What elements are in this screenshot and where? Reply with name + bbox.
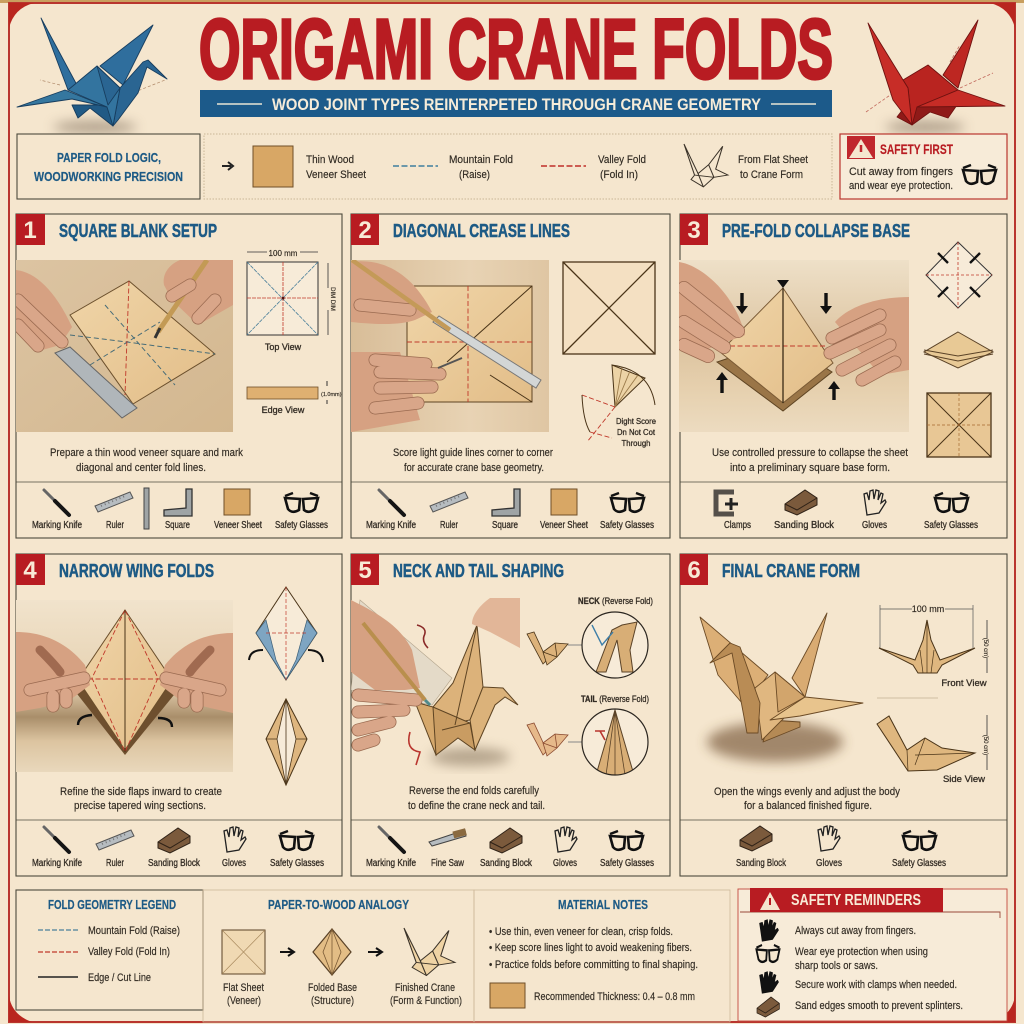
heading: fold logic — [34, 151, 183, 184]
photo: scoring crease — [351, 260, 549, 432]
tools row: Marking Knife — [366, 520, 416, 531]
step number 1: 1 — [23, 217, 37, 244]
key: flat to crane — [738, 154, 808, 181]
step text: for accurate crane base geometry. — [404, 462, 544, 474]
step text — [60, 786, 222, 812]
safety text — [849, 166, 953, 192]
diagram: side view: (50 cm) — [982, 735, 988, 755]
step number 3: 3 — [687, 217, 701, 244]
reminder 2: sharp tools or saws. — [795, 960, 878, 972]
flat sheet: (Veneer) — [227, 995, 261, 1007]
flat sheet: Flat Sheet — [223, 982, 264, 994]
step text: into a preliminary square base form. — [730, 462, 890, 474]
arrow — [280, 948, 294, 956]
key: flat to crane: From Flat Sheet — [738, 154, 808, 166]
step number 2 — [351, 214, 379, 245]
heading: safety first: SAFETY FIRST — [880, 141, 953, 157]
reminder 3: Secure work with clamps when needed. — [795, 979, 957, 991]
key: thin wood: Thin Wood — [306, 154, 354, 166]
tools row: Gloves — [862, 520, 887, 531]
step heading: PRE-FOLD COLLAPSE BASE — [722, 221, 910, 241]
diagram: edge view: Edge View — [262, 405, 305, 415]
step text: to define the crane neck and tail. — [408, 800, 545, 812]
tools row: Ruler — [106, 858, 124, 869]
note bullets: • Practice folds before committing to final shaping. — [489, 959, 698, 971]
crane caption: Finished Crane — [395, 982, 455, 994]
legend heading: FOLD GEOMETRY LEGEND — [48, 898, 176, 912]
step heading: DIAGONAL CREASE LINES — [393, 221, 570, 241]
note bullets: • Use thin, even veneer for clean, crisp folds. — [489, 926, 673, 938]
diagram: wing flaps — [249, 587, 323, 785]
tools row: Gloves — [553, 858, 577, 869]
panel: step 6 — [680, 554, 1007, 876]
tools row: Clamps — [724, 520, 751, 531]
key: valley fold: Valley Fold — [598, 154, 646, 166]
step text: Use controlled pressure to collapse the sheet — [712, 447, 908, 459]
legend: mountain: Mountain Fold (Raise) — [88, 925, 180, 937]
tools row: Safety Glasses — [270, 858, 324, 869]
icon: glove — [760, 972, 778, 993]
tools row: Veneer Sheet — [540, 520, 588, 531]
tools row: Safety Glasses — [892, 858, 946, 869]
notes heading: MATERIAL NOTES — [558, 898, 648, 912]
icon: line crane — [684, 144, 728, 187]
diagram: front view: Front View — [941, 678, 987, 689]
icon: glasses — [963, 165, 996, 184]
step text — [50, 447, 243, 474]
diagram: side view: Side View — [943, 774, 985, 785]
recommended thickness — [490, 983, 695, 1008]
photo: marking the veneer — [16, 260, 233, 432]
step text: Open the wings evenly and adjust the body — [714, 786, 900, 798]
photo: collapsing base — [679, 260, 909, 432]
step text — [393, 447, 553, 474]
legend: valley: Valley Fold (Fold In) — [88, 946, 170, 958]
step text: for a balanced finished figure. — [744, 800, 872, 812]
tools row: Marking Knife — [32, 520, 82, 531]
crane caption: (Form & Function) — [390, 995, 462, 1007]
icon: warning triangle — [847, 136, 875, 159]
photo: finished crane — [700, 613, 863, 762]
tools row: Gloves — [222, 858, 246, 869]
flat sheet — [222, 930, 265, 1007]
subtitle banner — [200, 90, 832, 117]
note bullets — [489, 926, 698, 971]
legend: edge — [38, 972, 151, 984]
diagram: front view: 100 mm — [912, 604, 944, 614]
photo: neck and tail — [351, 598, 520, 766]
step text: Refine the side flaps inward to create — [60, 786, 222, 798]
key strip — [204, 134, 832, 199]
folded base: Folded Base — [308, 982, 357, 994]
panel: material notes — [474, 890, 730, 1022]
panel: paper fold logic — [17, 134, 200, 199]
diagram: tail reverse fold: TAIL (Reverse Fold) — [581, 694, 649, 704]
safety text: and wear eye protection. — [849, 180, 953, 192]
tools row — [366, 827, 654, 869]
step text — [712, 447, 908, 474]
step heading: NARROW WING FOLDS — [59, 561, 214, 581]
step text: Score light guide lines corner to corner — [393, 447, 553, 459]
step number 5 — [351, 554, 379, 585]
panel: step 2 — [351, 214, 670, 538]
diagram: edge view — [247, 381, 342, 415]
tools row: Safety Glasses — [275, 520, 328, 531]
key: valley fold: (Fold In) — [600, 169, 638, 181]
icon: glasses — [756, 945, 780, 962]
panel: step 4 — [16, 554, 342, 876]
panel: step 1 — [16, 214, 342, 538]
tools row — [32, 488, 328, 531]
step text: Reverse the end folds carefully — [409, 785, 539, 797]
legend: edge: Edge / Cut Line — [88, 972, 151, 984]
step text: precise tapered wing sections. — [74, 800, 206, 812]
key: thin wood: Veneer Sheet — [306, 169, 366, 181]
diagram: light score: Dn Not Cot — [617, 427, 656, 437]
tools row — [716, 490, 978, 531]
reminder 4: Sand edges smooth to prevent splinters. — [795, 1000, 963, 1012]
callout: safety first — [840, 134, 1007, 199]
reminders banner — [750, 888, 943, 912]
diagram: top view: DIM DIM — [329, 287, 335, 311]
diagram: crease square — [563, 262, 655, 354]
tools row: Marking Knife — [32, 858, 82, 869]
panel: step 3 — [679, 214, 1007, 538]
step text: Prepare a thin wood veneer square and mark — [50, 447, 243, 459]
step text — [408, 785, 545, 812]
tools row: Ruler — [106, 520, 124, 531]
step heading: FINAL CRANE FORM — [722, 561, 860, 581]
legend: valley — [38, 946, 170, 958]
analogy heading: PAPER-TO-WOOD ANALOGY — [268, 898, 410, 912]
step heading: SQUARE BLANK SETUP — [59, 221, 217, 241]
tools row: Sanding Block — [480, 858, 533, 869]
reminder 1: Always cut away from fingers. — [795, 925, 916, 937]
tools row: Marking Knife — [366, 858, 416, 869]
icon: red crane — [866, 20, 1005, 133]
icon: blue crane — [17, 18, 167, 133]
arrow — [222, 162, 233, 170]
step number 1 — [16, 214, 45, 245]
folded base: (Structure) — [311, 995, 354, 1007]
tools row: Sanding Block — [148, 858, 201, 869]
diagram: light score: Through — [622, 438, 651, 448]
icon: glove — [760, 920, 778, 941]
diagram: neck reverse fold — [527, 596, 653, 678]
step text: diagonal and center fold lines. — [76, 462, 206, 474]
diagram: light score — [582, 365, 656, 448]
step number 4 — [16, 554, 45, 585]
diagram: top view: 100 mm — [269, 249, 298, 258]
key: mountain fold — [393, 154, 513, 181]
recommended thickness: Recommended Thickness: 0.4 – 0.8 mm — [534, 991, 695, 1003]
finished crane — [404, 928, 455, 976]
key: valley fold — [541, 154, 646, 181]
diagram: top view: Top View — [265, 342, 302, 352]
tools row: Fine Saw — [431, 858, 465, 869]
key: mountain fold: (Raise) — [459, 169, 490, 181]
step number 3 — [680, 214, 708, 245]
diagram: light score: Dight Score — [616, 416, 656, 426]
tools row: Safety Glasses — [600, 520, 654, 531]
diagram: collapse steps — [924, 242, 993, 457]
step text — [714, 786, 900, 812]
tools row — [32, 827, 324, 869]
step number 5: 5 — [358, 557, 372, 584]
folded base — [308, 929, 357, 1007]
key: mountain fold: Mountain Fold — [449, 154, 513, 166]
diagram: tail reverse fold — [527, 694, 649, 775]
photo: wing folds — [16, 600, 233, 772]
key: thin wood — [306, 154, 366, 181]
tools row — [366, 489, 654, 531]
panel: fold geometry legend — [16, 890, 203, 1010]
note bullets: • Keep score lines light to avoid weakening fibers. — [489, 942, 692, 954]
panel: safety reminders — [738, 888, 1007, 1021]
tools row: Square — [165, 520, 190, 531]
crane caption — [390, 982, 462, 1007]
heading: fold logic: WOODWORKING PRECISION — [34, 170, 183, 184]
reminder 2 — [795, 946, 928, 972]
step number 2: 2 — [358, 217, 372, 244]
tools row: Safety Glasses — [924, 520, 978, 531]
panel: step 5 — [351, 554, 670, 876]
tools row: Ruler — [440, 520, 458, 531]
panel: paper-to-wood analogy — [203, 890, 474, 1022]
step number 6 — [680, 554, 708, 585]
step number 4: 4 — [23, 557, 37, 584]
tools row: Sanding Block — [774, 520, 835, 531]
diagram: edge view: (1.0mm) — [321, 392, 342, 398]
icon: veneer swatch — [253, 146, 293, 187]
reminder 2: Wear eye protection when using — [795, 946, 928, 958]
subtitle banner: WOOD JOINT TYPES REINTERPETED THROUGH CRANE GEOMETRY — [272, 95, 762, 114]
diagram: neck reverse fold: NECK (Reverse Fold) — [578, 596, 653, 606]
tools row: Square — [492, 520, 518, 531]
step heading: NECK AND TAIL SHAPING — [393, 561, 564, 581]
tools row: Gloves — [816, 858, 842, 869]
tools row: Sanding Block — [736, 858, 787, 869]
tools row — [736, 826, 946, 869]
heading: fold logic: PAPER FOLD LOGIC, — [57, 151, 161, 165]
tools row: Safety Glasses — [600, 858, 654, 869]
diagram: side view — [877, 715, 988, 785]
reminders banner: SAFETY REMINDERS — [791, 892, 921, 909]
icon: sanding block — [757, 997, 779, 1017]
arrow — [368, 948, 382, 956]
key: flat to crane: to Crane Form — [740, 169, 803, 181]
diagram: front view: (50 cm) — [982, 638, 988, 658]
safety text: Cut away from fingers — [849, 166, 953, 178]
step number 6: 6 — [687, 557, 701, 584]
tools row: Veneer Sheet — [214, 520, 262, 531]
diagram: top view — [247, 249, 335, 352]
diagram: front view — [877, 604, 988, 698]
